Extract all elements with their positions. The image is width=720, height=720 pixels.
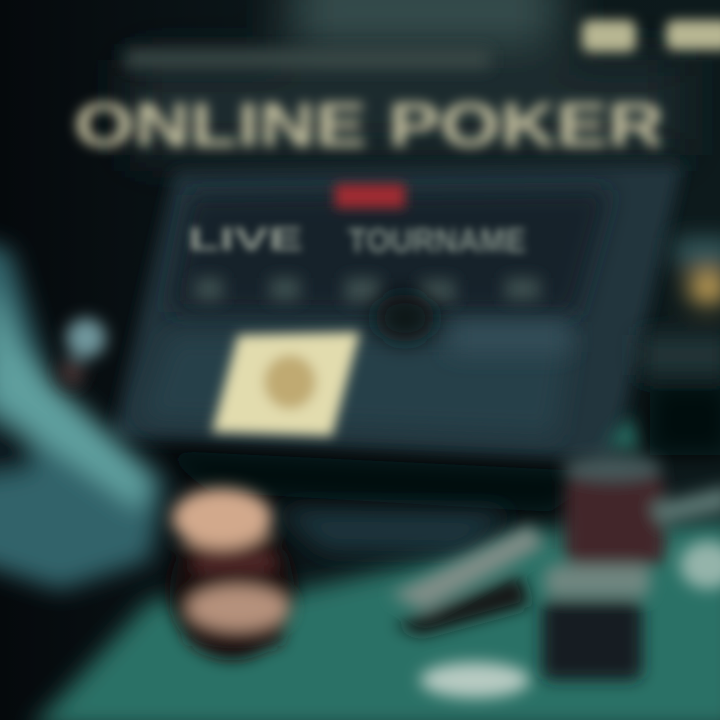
screen text: TOURNAME bbox=[348, 222, 526, 260]
right side objects bbox=[640, 238, 720, 455]
screen stats row bbox=[195, 278, 540, 302]
screen text: LIVE bbox=[188, 221, 303, 257]
subtitle bbox=[125, 50, 490, 68]
background glow bbox=[130, 0, 680, 155]
laptop base bbox=[155, 450, 610, 512]
red label bbox=[335, 184, 405, 208]
title: ONLINE POKER bbox=[74, 91, 664, 160]
screen dark blob bbox=[375, 294, 435, 342]
laptop screen bbox=[112, 165, 682, 462]
screen button bbox=[450, 322, 570, 352]
cards on table bbox=[390, 525, 545, 698]
hand bbox=[59, 318, 106, 387]
laptop bbox=[112, 165, 682, 552]
screen text bbox=[188, 221, 526, 260]
top right badge bbox=[582, 20, 720, 52]
playing card bbox=[212, 332, 360, 436]
chip stack right bbox=[542, 415, 720, 680]
chip stack left bbox=[170, 488, 294, 660]
sleeve bbox=[0, 240, 165, 590]
table bbox=[30, 520, 720, 720]
